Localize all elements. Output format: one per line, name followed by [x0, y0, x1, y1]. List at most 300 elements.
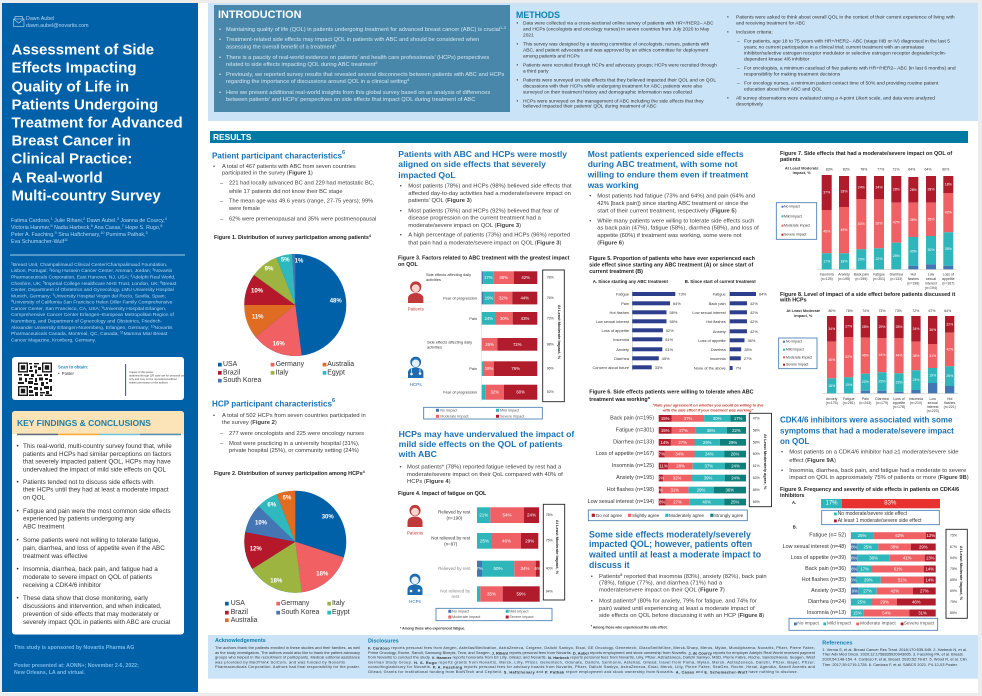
bar chart: figure 4: 46% — [502, 538, 511, 544]
conclusions list: These data show that close monitoring, early — [23, 595, 149, 602]
stacked bar chart: figure 6: 29% — [729, 440, 737, 445]
affiliations: Cheshire, UK; 5Imperial College Healthcare NHS Trust, London, UK; 6Breast — [11, 280, 177, 287]
HCPs label: HCPs — [410, 382, 422, 387]
stacked column chart: (n=195) — [855, 277, 867, 281]
stacked column chart: (n=210) — [910, 401, 922, 405]
stacked column chart: Low — [928, 272, 935, 276]
legend: figure 6: Moderately agree — [669, 513, 705, 518]
bar chart: figure 4: (n=190) — [446, 516, 463, 520]
text: affected day-to-day activities had a moderate/severe impact on — [408, 191, 571, 197]
total box — [543, 270, 564, 402]
methods text right column: and receiving treatment for ABC — [736, 20, 806, 26]
acknowledgements: Acknowledgements — [215, 638, 266, 644]
pie chart: HCPs: 12% — [250, 547, 262, 553]
figure 9 title: inhibitors — [780, 493, 805, 499]
bar chart: figure 4: Not relieved by — [440, 588, 471, 594]
stacked column chart: 28% — [910, 188, 917, 192]
stacked bar chart: figure 9B: 54% — [882, 610, 891, 616]
references: Ther. 2017;39:1719-1728. 6. Cardoso F, et al. SABCS 2021. P4-12-03 Poster. — [822, 662, 958, 667]
pie legend: patients: Germany — [276, 361, 305, 368]
stacked column chart: 83% — [826, 167, 833, 171]
text: • — [589, 194, 591, 200]
sponsor and meeting note: New Orleans, LA and virtual. — [14, 670, 86, 676]
bar chart: figure 5B: None of the above — [694, 366, 726, 370]
pie chart: HCPs: 6% — [267, 502, 277, 508]
bar chart: figure 4: 6% — [534, 566, 541, 571]
stacked bar chart: figure 6: 26% — [731, 452, 739, 456]
text: • — [591, 599, 593, 605]
stacked bar chart: figure 9B: 25% — [863, 544, 872, 550]
stacked column chart: 44% — [879, 353, 885, 357]
methods text left column: • — [516, 100, 518, 104]
bar chart: figure 5B: Fatigue — [713, 292, 726, 296]
stacked bar chart: figure 9B: Low sexual interest (n=48) — [783, 544, 846, 550]
conclusions list: receiving a CDK4/6 inhibitor — [23, 582, 101, 589]
disclosures: Disclosures — [368, 638, 399, 644]
text: • — [213, 164, 215, 170]
stacked column chart: 31% — [929, 354, 936, 358]
bar chart: figure 5B: B. Since start of current treatment — [685, 279, 756, 284]
methods text left column: • — [516, 78, 518, 84]
stacked column chart: (n=167) — [942, 282, 954, 286]
pie chart: HCPs: 10% — [255, 521, 268, 527]
heading: methods: METHODS — [516, 10, 560, 20]
conclusions list: patients and HCPs had similar perceptions on factors — [23, 451, 171, 458]
text: • — [400, 233, 402, 239]
stacked column chart: interest — [925, 282, 937, 286]
stacked bar chart: figure 6: 3% — [657, 488, 663, 492]
bar chart: figure 5A: Loss of appetite — [602, 328, 629, 333]
text: Most patients on a CDK4/6 inhibitor had ≥1 moderate/severe side — [789, 450, 959, 456]
stacked column chart: 20% — [858, 257, 865, 261]
pie legend: patients: Egypt — [327, 370, 345, 376]
bar chart: figure 4: 35% — [487, 592, 496, 596]
stacked bar chart: figure 6: 8% — [659, 500, 665, 504]
stacked column chart: Diarrhea — [875, 397, 889, 401]
methods text right column: For oncologists, a minimum caseload of five patients with HR+/HER2– ABC (in last 6 months) and — [744, 66, 956, 72]
legend: figure 9A: No moderate/severe side effect — [838, 511, 908, 517]
legend: figure 9B: Moderate impact — [860, 620, 896, 626]
bar chart: figure 3: 76% — [511, 366, 520, 371]
text: 62% were premenopausal and 35% were postmenopausal — [229, 217, 376, 223]
title: Quality of Life in — [12, 78, 129, 96]
text: – — [220, 199, 224, 205]
axis caption: Impact, % — [794, 313, 813, 318]
bar chart: figure 3: 18% — [485, 366, 493, 371]
bar chart: figure 5B: Diarrhea — [711, 347, 727, 352]
text: – — [220, 180, 224, 186]
stacked bar chart: figure 9B: 25% — [857, 600, 866, 604]
stacked column chart: interest — [927, 405, 938, 409]
text: Most were practicing in a university hospital (31%), — [229, 441, 360, 447]
text: Most patients (76%) and HCPs (92%) believed that fear of — [408, 209, 559, 215]
stacked bar chart: figure 6: 5% — [658, 476, 664, 480]
bar chart: figure 5B: 42% — [750, 301, 758, 306]
stacked column chart: 22% — [875, 257, 883, 261]
legend: figure 6: Do not agree — [596, 513, 623, 518]
pie chart: patients: 48% — [330, 299, 342, 305]
text: • — [589, 219, 591, 225]
stacked column chart: Loss of — [943, 272, 954, 276]
heading: during ABC treatment, with some not — [588, 159, 738, 169]
stacked column chart: (n=223) — [927, 409, 939, 413]
stacked column chart: 49% — [840, 228, 848, 232]
stacked bar chart: figure 6: 15% — [661, 416, 670, 421]
figure 8 title: with HCPs — [779, 298, 807, 304]
total box: 65% — [950, 578, 957, 582]
text: moderate/severe impact on their QoL compared with 40% of — [407, 472, 563, 478]
methods text left column — [516, 20, 717, 110]
authors: Eva Schumacher-Wulf11 — [11, 238, 68, 245]
bar chart: figure 4: 21% — [479, 512, 488, 518]
stacked column chart: 64% — [908, 167, 915, 171]
panel: figure 8 — [779, 292, 958, 413]
conclusions list: moderate to severe impact on QOL of patients — [23, 574, 152, 581]
text: HCPs (Figure 4) — [407, 479, 451, 485]
affiliations: 1Breast Unit, Champalimaud Clinical Center/Champalimaud Foundation, — [11, 261, 167, 268]
bar chart: figure 3 — [426, 269, 564, 402]
legend: figure 8: Mild impact — [786, 348, 804, 352]
row labels: Fear of progression — [443, 296, 477, 300]
legend: figure 3: Moderate impact — [440, 414, 470, 418]
text: start of their current treatment, respectively (Figure 5) — [597, 209, 737, 215]
bar chart: figure 5A: 33% — [655, 365, 663, 370]
legend: figure 4 — [436, 608, 552, 621]
stacked bar chart: figure 6: 11% — [659, 464, 668, 468]
stacked column chart: (n=178) — [893, 405, 905, 409]
sponsor and meeting note — [14, 645, 139, 676]
row labels: activities — [426, 277, 441, 282]
bar chart: figure 3: 72% — [513, 342, 522, 347]
text: • — [591, 574, 593, 580]
stacked column chart: 67% — [928, 309, 936, 313]
introduction text: between patients’ and HCPs’ perspectives on side effects that impact QOL during treatment of ABC — [226, 97, 475, 103]
stacked column chart: sexual — [928, 401, 938, 405]
stacked column chart: 73% — [878, 309, 886, 313]
stacked bar chart: figure 6: 29% — [703, 440, 712, 445]
stacked bar chart: figure 9B: 27% — [920, 588, 929, 594]
title: Multi-country Survey — [12, 188, 161, 204]
total box: At Least Moderate Impact, % — [555, 520, 560, 575]
total box — [946, 529, 967, 618]
legend: figure 9A — [822, 510, 939, 525]
stacked bar chart: figure 9B: 25% — [858, 533, 866, 538]
figure 5 title: current treatment (B) — [589, 269, 643, 275]
conclusions list: • — [16, 566, 19, 573]
bar chart: figure 5A: Anxiety — [616, 347, 629, 352]
legend: figure 4: Mild impact — [509, 609, 529, 613]
text: the survey (Figure 2) — [222, 420, 277, 426]
stacked column chart: 18% — [945, 182, 952, 186]
text: • — [213, 413, 215, 419]
panel: HCP participant characteristics — [212, 398, 366, 624]
bar chart: figure 3: 32% — [499, 296, 508, 300]
row labels: Fear of progression — [443, 390, 477, 394]
pie chart: HCPs — [244, 491, 346, 593]
bar chart: figure 3: 60% — [516, 390, 525, 395]
stacked bar chart: figure 9B: 13% — [926, 556, 935, 560]
total box — [543, 504, 565, 600]
text: Insomnia, diarrhea, back pain, and fatigue had a moderate to severe — [789, 468, 966, 474]
bar chart: figure 5A: 45% — [662, 356, 670, 361]
survey question: “Rate your agreement on whether you would be willing to live — [652, 404, 764, 408]
axis caption: At Least Moderate — [785, 166, 819, 170]
legend: figure 8: Severe impact — [786, 363, 808, 367]
pie legend: patients: Brazil — [223, 370, 241, 376]
legend: figure 9B: Severe impact — [904, 620, 935, 626]
text: – — [220, 217, 224, 223]
stacked bar chart: figure 9B: 9% — [852, 588, 858, 594]
introduction text: regarding the importance of discussions around QOL in a clinical setting4 — [226, 77, 410, 85]
row labels: Pain — [469, 366, 477, 371]
stacked bar chart: figure 9B: 8% — [851, 556, 857, 560]
text: pain) waited until experiencing at least a moderate impact of — [599, 606, 755, 612]
introduction text: Maintaining quality of life (QOL) in patients undergoing treatment for advanced breast cancer (ABC) is crucial1-3 — [226, 25, 507, 33]
acknowledgements: The authors thank the patients enrolled in these studies and their families, as well — [215, 645, 360, 650]
icon: HCP — [408, 574, 422, 595]
stacked column chart: 46% — [823, 230, 830, 234]
legend: figure 7 — [776, 203, 817, 239]
pie legend: HCPs — [225, 600, 350, 624]
methods text left column: 2021 — [523, 32, 534, 38]
introduction text: assessing the overall benefit of a treatment1 — [226, 42, 337, 50]
affiliations: Nuremberg, and Department of Gynecology and Obstetrics, Friedrich- — [11, 318, 163, 324]
authors: Peter A. Fasching,9 Sina Haftchenary,10 Purnima Pathak,3 — [11, 231, 148, 238]
stacked column chart: Pain — [862, 397, 869, 401]
copyright note: written permission of the authors — [129, 380, 168, 384]
stacked column chart — [817, 167, 957, 290]
references: Ther Adv Med Oncol. 2020;12:1758835920943065. 3. Fasching PA, et al. Breast. — [822, 652, 964, 656]
acknowledgements — [215, 638, 360, 669]
stacked column chart: Fatigue — [873, 272, 885, 276]
stacked column chart: (n=133) — [890, 277, 902, 281]
methods text right column: • — [727, 30, 729, 36]
figure 8 title — [779, 292, 955, 304]
legend: figure 9A: At least 1 moderate/severe side effect — [838, 518, 922, 524]
total box: 78% — [547, 276, 554, 280]
stacked column chart: Anxiety — [838, 272, 850, 276]
stacked column chart: 72% — [912, 309, 919, 313]
heading: willing to endure them even if treatment — [587, 169, 748, 179]
heading: mild side effects on the QOL of patients — [399, 439, 563, 449]
stacked bar chart: figure 9B: Loss of appetite (n=39) — [791, 555, 846, 561]
total box: At Least Moderate Impact, % — [959, 546, 964, 601]
bar chart: figure 3: 30% — [500, 316, 509, 321]
stacked column chart: (n=195) — [838, 277, 850, 281]
bar: figure 9A: A. — [792, 500, 796, 505]
disclosures: Gilead; Grants for institutional funding from BioNTech and Cepheid. S. Haftchenary and P. Pathak report employment and stock ownership from Novartis. A. Casas and E. Schumacher-Wulf have nothing to disclose. — [368, 669, 798, 674]
conclusions list: severely impact QOL in patients with ABC are crucial — [23, 619, 170, 626]
text: appetite (60%) if treatment was working, some were not — [597, 233, 742, 239]
pie chart: patients: 1% — [295, 259, 304, 265]
heading: symptoms that had a moderate/severe impact — [780, 426, 954, 436]
stacked column chart: 24% — [913, 378, 919, 382]
legend: figure 6 — [588, 510, 747, 521]
stacked bar chart: figure 6: 39% — [704, 476, 712, 480]
methods text right column: descriptively — [736, 102, 763, 108]
total box: 75% — [950, 567, 957, 571]
stacked column chart: 82% — [843, 167, 850, 171]
heading: key findings: KEY FINDINGS & CONCLUSIONS — [17, 418, 151, 428]
stacked column chart: 42% — [946, 348, 953, 352]
methods text right column: education about their ABC and QOL — [744, 86, 822, 92]
conclusions list: their HCPs until they had at least a moderate impact — [23, 486, 169, 494]
legend: figure 3 — [424, 407, 542, 419]
total box: 92% — [547, 390, 554, 394]
stacked column chart: appetite — [942, 277, 955, 281]
conclusions list: • — [16, 595, 19, 602]
methods text left column: • — [516, 64, 518, 68]
stacked column chart: Insomnia — [909, 397, 923, 401]
stacked column chart: Anxiety — [826, 397, 838, 401]
conclusions list: Some patients were not willing to tolerate fatigue, — [23, 537, 160, 544]
heading: discuss it — [589, 560, 630, 570]
figure 7 title — [780, 151, 952, 163]
stacked column chart: 46% — [862, 354, 869, 358]
text: • — [400, 465, 402, 471]
stacked bar chart: figure 6: Insomnia (n=125) — [612, 463, 654, 469]
text — [213, 164, 376, 223]
panel: footer — [208, 635, 978, 679]
bar: figure 9A: 83% — [884, 501, 897, 507]
footnote: * Among those who experienced fatigue. — [400, 627, 465, 631]
bar chart: figure 5B: Anxiety — [713, 329, 726, 334]
stacked column chart: Diarrhea — [890, 272, 903, 276]
conclusions list: discussions and intervention, and when indicated, — [23, 603, 162, 610]
conclusions list — [16, 443, 172, 626]
stacked bar chart: figure 9B: 62% — [895, 533, 904, 538]
affiliations: Pharmaceuticals Canada, Montreal, QC, Canada; 11Mamma Mia! Breast — [11, 331, 168, 337]
stacked column chart: Fatigue — [843, 397, 855, 401]
text: • — [400, 209, 402, 215]
total box: 65% — [753, 488, 760, 492]
figure 3 title — [398, 256, 570, 268]
methods text right column: years; no current participation in a clinical trial; current treatment with an aromatase — [744, 44, 925, 50]
affiliations: Munich, Germany; 7University Hospital Virgen del Rocío, Sevilla, Spain; — [11, 293, 166, 299]
stacked bar chart: figure 6: Hot flashes (n=198) — [607, 487, 654, 493]
bar chart: figure 4: Relieved by rest — [438, 566, 471, 571]
bar chart: figure 4: Relieved by rest — [438, 510, 471, 514]
methods text right column: Patients were asked to think about overall QOL in the context of their current experience of living with — [736, 14, 955, 20]
bar chart: figure 5A: A. Since starting any ABC treatment — [593, 279, 668, 284]
stacked column chart: 19% — [845, 383, 852, 387]
heading: introduction: INTRODUCTION — [218, 9, 302, 21]
conclusions list: • — [16, 443, 19, 450]
legend: figure 3: No impact — [440, 408, 458, 412]
methods text right column: dependent kinase 4/6 inhibitor — [744, 56, 810, 62]
stacked column chart: 71% — [892, 167, 900, 171]
methods text right column: Inclusion criteria: — [736, 30, 773, 36]
references: 2020;54:148-154. 4. Cardoso F, et al. Breast. 2020;52:78-87. 5. Wood R, et al. Clin — [822, 656, 967, 662]
bar chart: figure 3: 42% — [521, 275, 530, 280]
legend: figure 6: Slightly agree — [632, 513, 660, 518]
pie chart: patients: 5% — [281, 258, 290, 264]
pie chart: patients — [244, 254, 346, 356]
authors: Fatima Cardoso,1 Julie Rihani,2 Dawn Aubel,3 Joanna de Courcy,4 — [11, 217, 167, 224]
methods text left column: discussions with their HCPs while undergoing treatment for ABC; patients were also — [523, 84, 703, 90]
pie legend: HCPs: Egypt — [332, 609, 350, 616]
total box: 75% — [546, 538, 553, 542]
figure 3 title: on QOL — [398, 262, 418, 268]
total box: At Least Moderate Impact, % — [557, 305, 562, 360]
stacked column chart: 78% — [860, 167, 867, 171]
stacked column chart — [822, 309, 958, 413]
axis caption: At Least Moderate — [786, 308, 821, 313]
title — [12, 42, 183, 204]
panel: introduction and methods band — [208, 3, 978, 121]
bar chart: figure 5A: Diarrhea — [614, 356, 630, 361]
conclusions list: prevention of side effects that may moderately or — [23, 611, 159, 618]
survey question — [652, 404, 764, 412]
text: While many patients were willing to tolerate side effects such — [597, 219, 754, 225]
bar chart: figure 4: (n=97) — [444, 542, 458, 546]
stacked column chart: 38% — [913, 354, 919, 358]
bar chart: figure 5A: 73% — [678, 292, 687, 296]
affiliations: Alexander University Erlangen-Nuremberg, Erlangen, Germany; 10Novartis — [11, 324, 173, 331]
pie chart: HCPs: 6% — [283, 496, 292, 502]
bar chart: figure 5B: Insomnia — [710, 356, 727, 361]
total box: 58% — [753, 428, 760, 432]
figure 6 title — [589, 390, 754, 403]
figure 1 title: Figure 1. Distribution of survey participation among patients4 — [214, 234, 372, 241]
legend: figure 9B — [789, 618, 938, 630]
stacked column chart: 35% — [945, 247, 952, 251]
legend: figure 3: Mild impact — [500, 408, 520, 412]
stacked column chart: 73% — [895, 309, 902, 313]
legend: figure 7: No impact — [784, 205, 800, 209]
disclosures: F. Cardoso reports personal fees from Amgen, Astellas/Medivation, AstraZeneca, Celgene, Daiichi Sankyo, Eisai, GE Oncology, Genentech, GlaxoSmithKline, Merck-Sharp, Merus, Mylan, Mundipharma, Novartis, Pfizer, Pierre Fabre, — [368, 645, 815, 650]
text: 221 had locally advanced BC and 229 had metastatic BC, — [229, 180, 375, 186]
bar chart: figure 4: 50% — [493, 566, 503, 571]
bar chart: figure 5A: Concern about future — [592, 365, 629, 370]
disclosures — [368, 638, 816, 674]
heading: waited until at least a moderate impact to — [588, 549, 762, 559]
bar chart: figure 5B: 7% — [736, 366, 742, 370]
bar chart: figure 4: 59% — [516, 592, 526, 596]
pie legend: HCPs: USA — [231, 600, 245, 607]
text: while 17 patients did not know their BC stage — [228, 189, 343, 195]
stacked column chart: 74% — [862, 309, 869, 313]
bar chart: figure 3: 19% — [485, 296, 493, 300]
results banner — [210, 131, 968, 143]
stacked column chart: 27% — [845, 324, 852, 328]
stacked column chart: 34% — [913, 327, 919, 331]
stacked column chart: flashes — [908, 277, 919, 281]
bar chart: figure 5B: Loss of appetite — [698, 338, 726, 343]
methods text left column: and HCPs (oncologists and oncology nurses) in seven countries from July 2020 to May — [523, 26, 710, 32]
total box: 69% — [950, 589, 957, 593]
stacked column chart: 52% — [875, 222, 883, 226]
figure 4 title: Figure 4. Impact of fatigue on QOL — [398, 491, 487, 497]
bar chart: figure 5B: 36% — [748, 338, 756, 343]
bar chart: figure 5B: 42% — [750, 319, 758, 324]
text: moderate/severe impact on QOL (Figure 3) — [408, 223, 521, 229]
scan text: • Poster — [58, 371, 75, 376]
panel: waited until moderate impact — [588, 529, 767, 630]
stacked bar chart: figure 6: 17% — [734, 416, 743, 421]
stacked column chart: 80% — [828, 309, 836, 313]
introduction text: There is a paucity of real-world evidence on patients’ and health care professionals’ (HCPs) perspectives — [226, 55, 489, 61]
bar chart: figure 5A: 58% — [670, 310, 678, 315]
heading: on QOL — [780, 437, 809, 446]
stacked column chart: 34% — [828, 327, 835, 331]
heading: Patients with ABC and HCPs were mostly — [398, 149, 567, 159]
acknowledgements: Pharmaceuticals Corporation. Authors had final responsibility for the poster. — [215, 664, 360, 669]
stacked bar chart: figure 9B: B. — [793, 524, 797, 530]
heading — [780, 416, 954, 446]
total box: 67% — [950, 545, 957, 549]
footnote: a Among those who experienced the side effect. — [591, 625, 668, 630]
